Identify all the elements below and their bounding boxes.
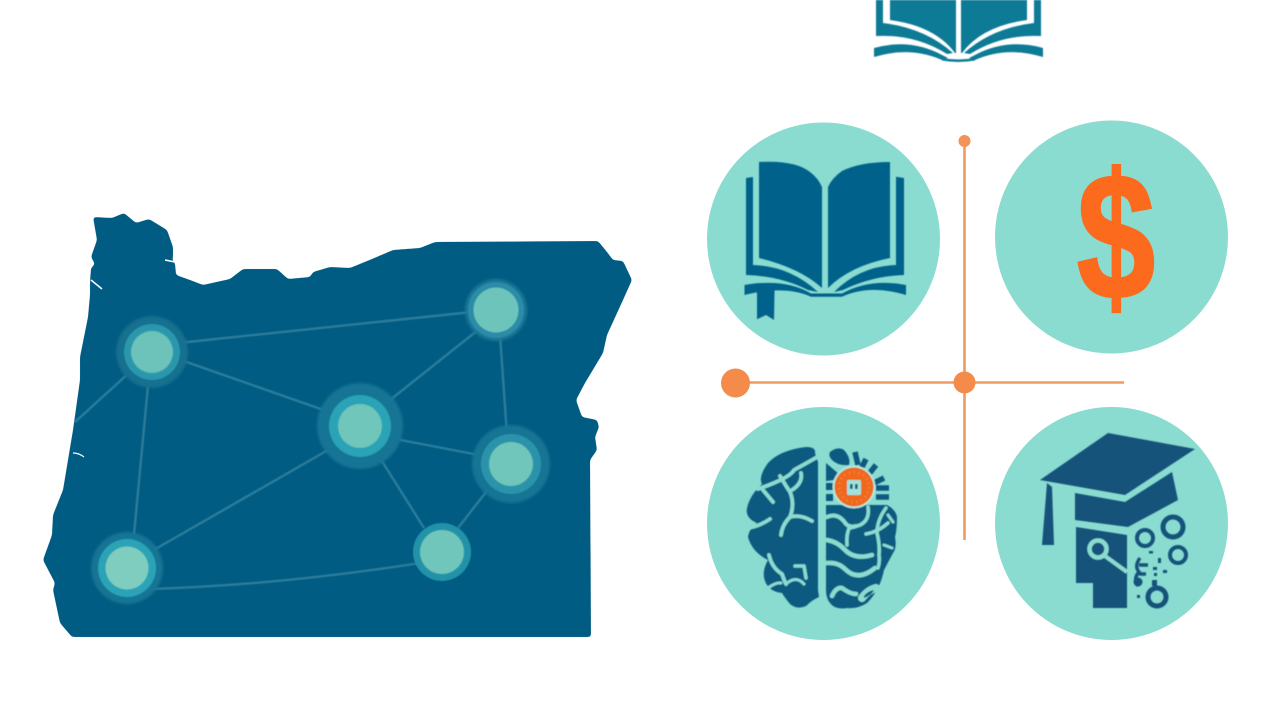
brain top-right lobes bbox=[826, 448, 849, 501]
panel: Oregon network map bbox=[43, 213, 632, 637]
network node 1 bbox=[116, 316, 188, 388]
icon: top open book bbox=[874, 0, 1043, 62]
network node 6 bbox=[91, 532, 163, 604]
map: Oregon silhouette bbox=[43, 213, 632, 637]
brain bottom stripe bbox=[864, 590, 874, 598]
brain right hemisphere bbox=[826, 505, 897, 608]
cap tassel bbox=[1042, 483, 1054, 545]
panel: dollar circle bbox=[995, 120, 1228, 354]
connector lines bbox=[735, 141, 1124, 540]
chip: centre bbox=[847, 480, 861, 495]
map: coastline nicks bbox=[73, 260, 175, 457]
cap top bbox=[1040, 433, 1195, 495]
network node 4 bbox=[472, 425, 550, 503]
network node 3 bbox=[317, 383, 403, 469]
icon: open book with ribbon bbox=[744, 162, 906, 320]
connector dot left bbox=[721, 368, 750, 398]
connector dot centre bbox=[954, 372, 976, 394]
circuit node bbox=[1090, 540, 1127, 572]
circle background bbox=[995, 120, 1228, 354]
brain left hemisphere bbox=[747, 447, 819, 608]
chip: orange ring bbox=[832, 466, 876, 508]
icon: brain with chip bbox=[747, 447, 897, 608]
panel: book circle bbox=[707, 122, 940, 356]
brain left veins bbox=[748, 456, 819, 588]
panel: brain circle bbox=[707, 407, 940, 640]
brain right veins bbox=[827, 507, 893, 598]
circle background bbox=[707, 407, 940, 640]
panel: graduation circle bbox=[995, 407, 1228, 640]
network node 2 bbox=[465, 279, 527, 341]
cap band bbox=[1075, 472, 1178, 527]
head profile bbox=[1076, 527, 1127, 608]
icon: graduate head with circuit bbox=[1040, 433, 1195, 608]
circle background bbox=[707, 122, 940, 356]
rings and particles bbox=[1134, 517, 1186, 606]
connector dot top bbox=[958, 135, 970, 147]
brain radiating ticks bbox=[855, 452, 889, 497]
circle background bbox=[995, 407, 1228, 640]
network connection lines bbox=[75, 312, 507, 589]
icon: dollar sign: $ bbox=[1077, 137, 1155, 337]
network node 5 bbox=[413, 523, 471, 581]
panel: orange connector cross bbox=[721, 135, 1124, 540]
